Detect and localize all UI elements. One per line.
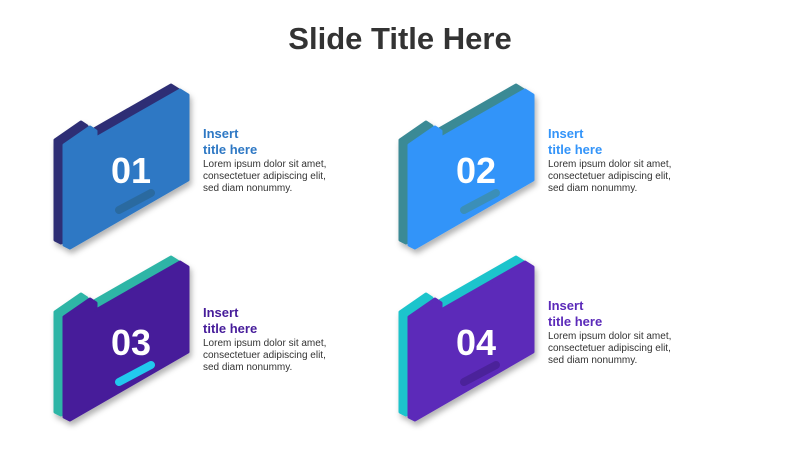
text 02 [548, 126, 671, 194]
folder 04: 04 [456, 322, 496, 363]
text 03: Insert [203, 305, 238, 320]
text 03: Lorem ipsum dolor sit amet, consectetuer adipiscing elit, sed diam nonummy. [203, 338, 326, 373]
text 04: title here [548, 314, 602, 329]
text 01: Insert [203, 126, 238, 141]
text 04: Insert [548, 298, 583, 313]
text 04: Lorem ipsum dolor sit amet, consectetuer adipiscing elit, sed diam nonummy. [548, 331, 671, 366]
text 01 [203, 126, 326, 194]
folder 02: 02 [456, 150, 496, 191]
text 02: Insert [548, 126, 583, 141]
folder 01: 01 [111, 150, 151, 191]
text 01: Lorem ipsum dolor sit amet, consectetuer adipiscing elit, sed diam nonummy. [203, 159, 326, 194]
text 02: Lorem ipsum dolor sit amet, consectetuer adipiscing elit, sed diam nonummy. [548, 159, 671, 194]
folder 01 [55, 85, 188, 248]
text 03: title here [203, 321, 257, 336]
text 02: title here [548, 142, 602, 157]
folder 03: 03 [111, 322, 151, 363]
folder 02 [400, 85, 533, 248]
folder 04 [400, 257, 533, 420]
text 01: title here [203, 142, 257, 157]
folder 03 [55, 257, 188, 420]
text 04 [548, 298, 671, 366]
title: Slide Title Here [288, 21, 512, 56]
text 03 [203, 305, 326, 373]
